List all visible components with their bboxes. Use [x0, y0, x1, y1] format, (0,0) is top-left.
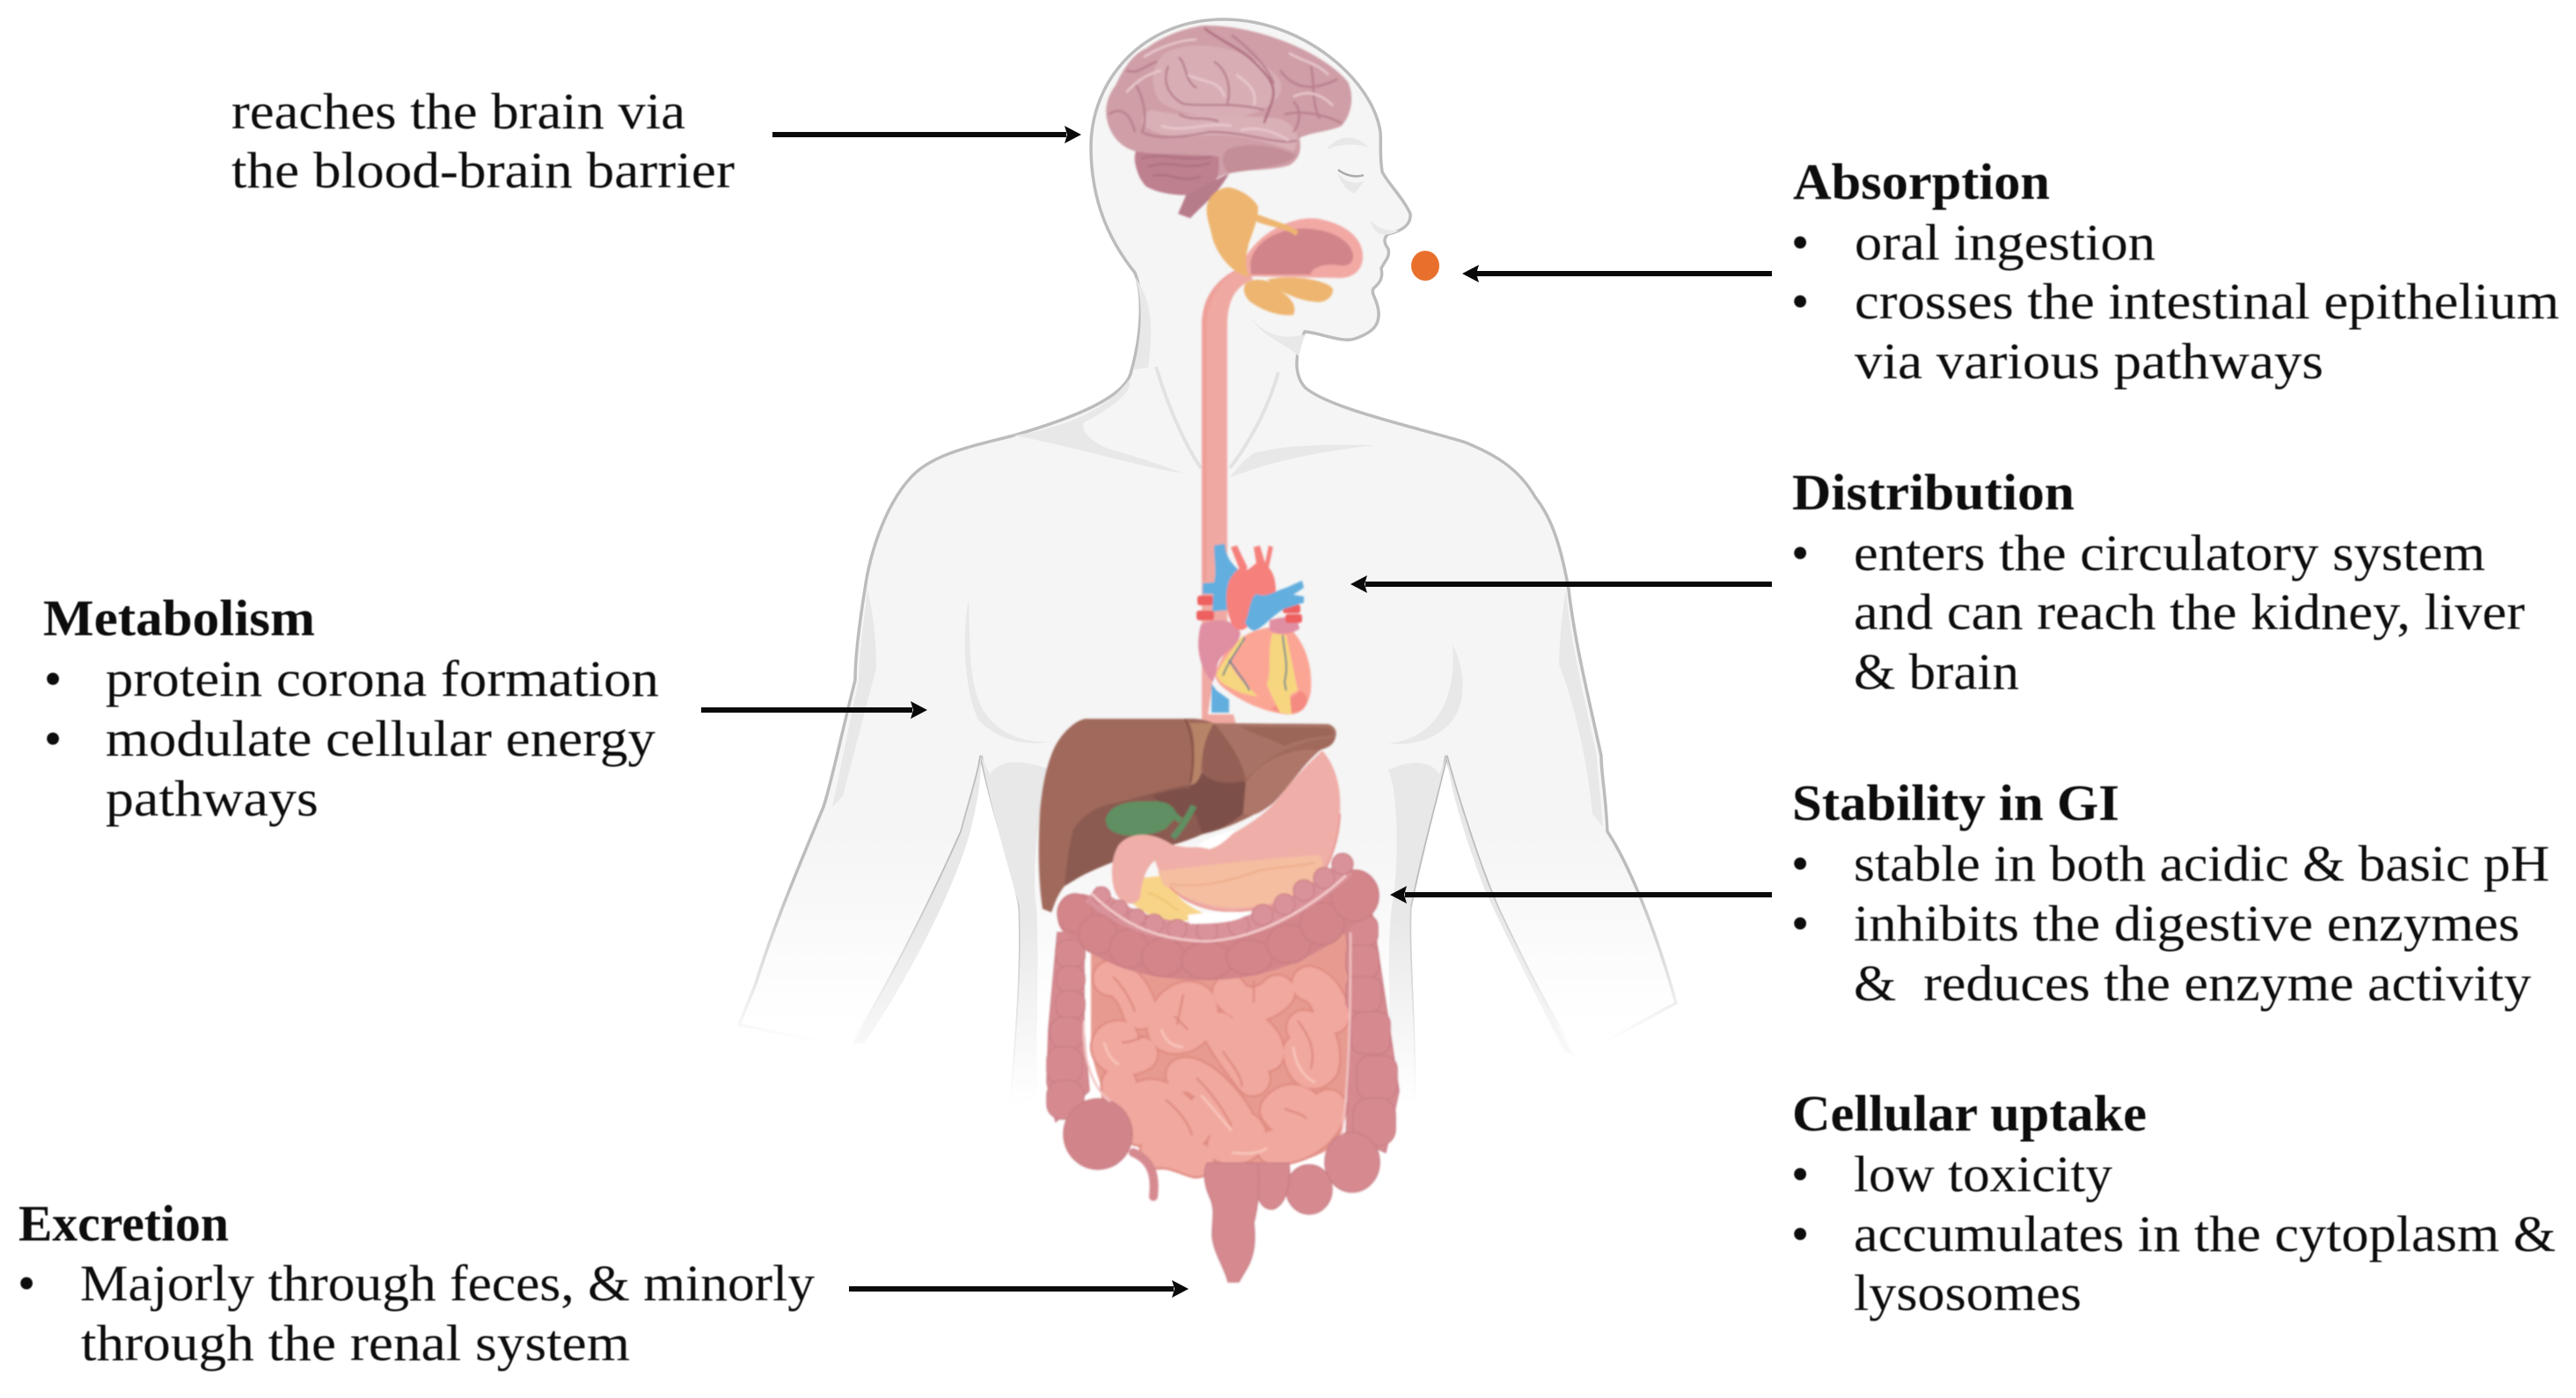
text: cellular uptake [1791, 1085, 2556, 1321]
organ: stomach [1112, 750, 1340, 911]
organ: heart [1197, 544, 1311, 714]
text: distribution: and can reach the kidney, liver [1854, 583, 2525, 640]
arrow: absorption [1462, 265, 1772, 282]
shading on the torso and arms [832, 137, 1603, 1104]
text: distribution: & brain [1854, 643, 2019, 700]
text: excretion: through the renal system [81, 1314, 630, 1372]
pulmonary artery [1245, 581, 1304, 631]
text: stability in GI: & reduces the enzyme activity [1854, 955, 2531, 1012]
text: excretion: Majorly through feces, & minorly [80, 1255, 815, 1312]
text: distribution [1791, 464, 2525, 700]
gut gaps [1188, 830, 1249, 924]
text: absorption: • [1791, 214, 1809, 271]
text: metabolism [43, 589, 659, 827]
text: metabolism: pathways [106, 770, 318, 827]
descending colon [1346, 915, 1399, 1153]
organ: salivary glands [1207, 187, 1333, 315]
text: absorption: oral ingestion [1855, 214, 2155, 271]
text: stability in GI: • [1791, 835, 1809, 892]
text: cellular uptake: low toxicity [1854, 1145, 2112, 1203]
human body silhouette [739, 19, 1676, 1109]
orange particle [1411, 251, 1439, 281]
text: stability in GI: • [1791, 895, 1809, 952]
aorta [1226, 545, 1276, 630]
text: cellular uptake: lysosomes [1854, 1264, 2082, 1321]
arrow: distribution [1350, 575, 1772, 593]
organ: brain [1106, 26, 1351, 218]
text: absorption [1791, 153, 2559, 390]
text: distribution: enters the circulatory system [1854, 524, 2485, 582]
organ: oral cavity [1245, 218, 1363, 278]
arrow: stability in GI [1390, 886, 1772, 904]
organ illustrations [1039, 26, 1399, 1282]
text: metabolism: • [44, 710, 62, 767]
text: absorption: via various pathways [1855, 333, 2324, 390]
text: excretion: Excretion [18, 1195, 229, 1252]
coronary vessels [1217, 635, 1258, 697]
text: metabolism: Metabolism [43, 589, 315, 647]
right atrium [1198, 620, 1240, 682]
text: distribution: Distribution [1792, 464, 2075, 521]
superior vena cava [1203, 544, 1239, 611]
text: stability in GI [1791, 774, 2550, 1012]
text: cellular uptake: • [1791, 1145, 1809, 1203]
text: cellular uptake: accumulates in the cytoplasm & [1854, 1205, 2556, 1263]
organ: pancreas [1133, 875, 1204, 922]
text: brain note: reaches the brain via [231, 83, 685, 140]
text: brain note [231, 83, 735, 199]
text: distribution: • [1791, 524, 1809, 582]
left atrium [1270, 617, 1299, 633]
arrow: excretion [849, 1280, 1189, 1298]
caecum and appendix [1064, 1099, 1154, 1197]
arrow: to brain [772, 126, 1081, 143]
text: brain note: the blood-brain barrier [231, 142, 735, 199]
ascending colon [1047, 933, 1089, 1122]
text: metabolism: protein corona formation [106, 650, 659, 707]
text: stability in GI: Stability in GI [1792, 774, 2119, 831]
text: stability in GI: stable in both acidic & basic pH [1854, 835, 2550, 892]
text: stability in GI: inhibits the digestive enzymes [1854, 895, 2520, 952]
text: metabolism: modulate cellular energy [106, 710, 655, 767]
text: excretion [18, 1195, 815, 1372]
organ: liver [1039, 719, 1336, 912]
red pulmonary vessels [1197, 596, 1302, 623]
inferior vena cava [1211, 684, 1229, 713]
text: absorption: • [1791, 273, 1809, 330]
torso side outlines [1011, 907, 1415, 1104]
organ: esophagus [1202, 264, 1253, 792]
text: cellular uptake: • [1791, 1205, 1809, 1263]
organ: gallbladder [1106, 801, 1194, 838]
rectum and sigmoid colon [1204, 1132, 1379, 1282]
text: cellular uptake: Cellular uptake [1792, 1085, 2147, 1142]
organ: large intestine [1047, 853, 1399, 1282]
text: excretion: • [18, 1255, 35, 1312]
text: absorption: crosses the intestinal epithelium [1855, 273, 2559, 330]
transverse colon [1057, 853, 1379, 979]
arrow: metabolism [701, 701, 927, 719]
text: metabolism: • [44, 650, 62, 707]
text: absorption: Absorption [1793, 153, 2050, 210]
small intestine [1091, 933, 1349, 1173]
